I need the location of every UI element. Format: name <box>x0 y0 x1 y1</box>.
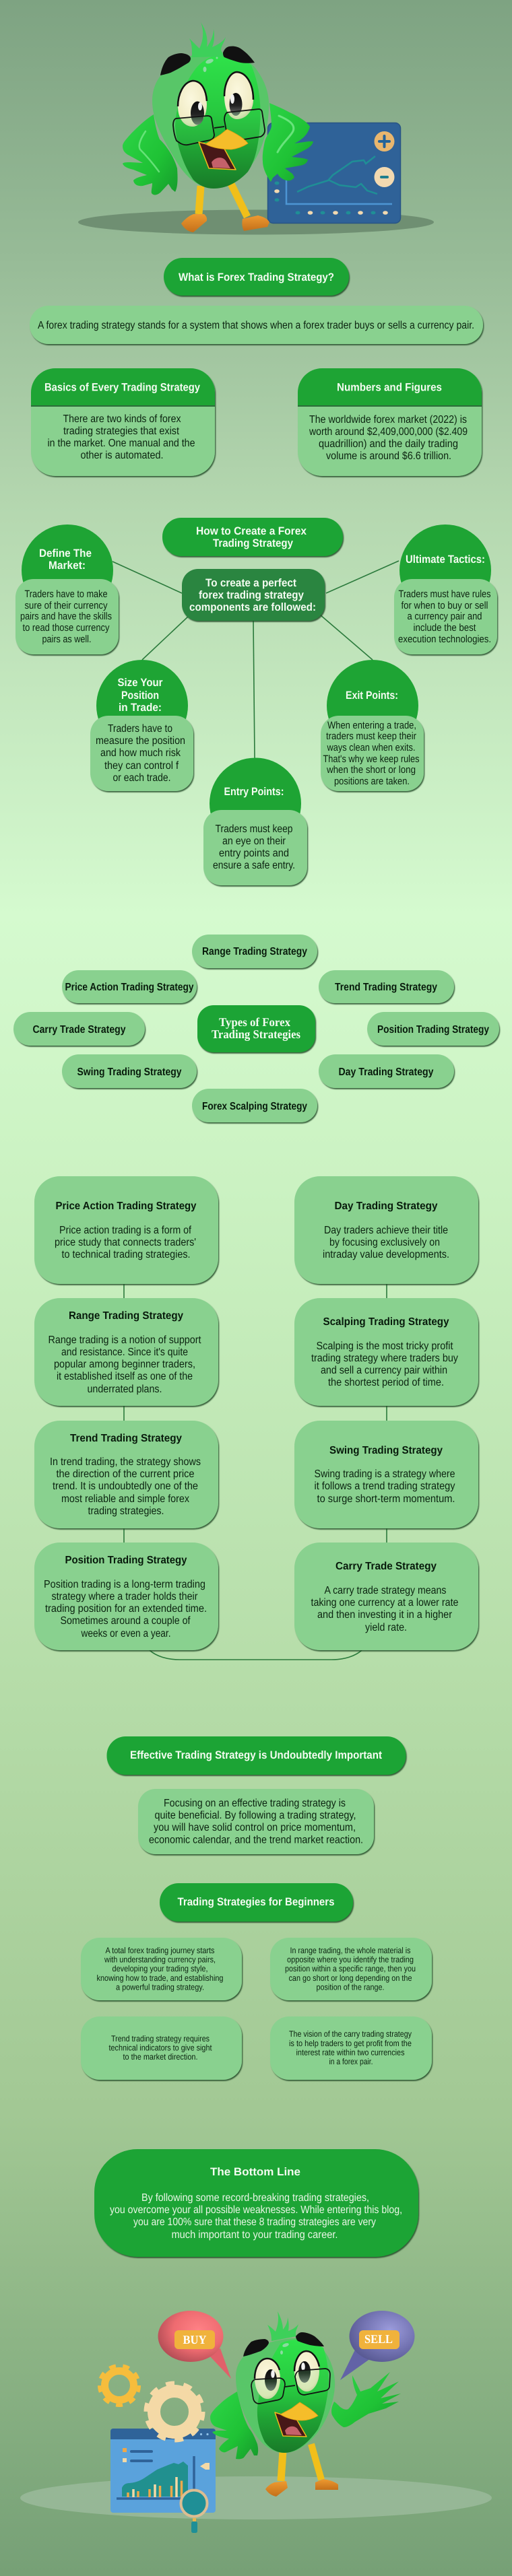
panel: the bottom line <box>94 2149 418 2257</box>
pill: scalping <box>192 1089 317 1122</box>
central node: components are followed: <box>189 601 316 613</box>
node: define the market: Define The <box>39 547 92 560</box>
beginner card: trend <box>81 2016 242 2080</box>
tongue <box>212 158 230 168</box>
node: ultimate tactics: Traders must have rules <box>399 588 490 600</box>
centre: types of forex trading strategies: Types of Forex <box>219 1015 290 1029</box>
node: define the market <box>15 524 119 654</box>
text card: focusing on effective strategy: economic calendar, and the trend market reaction. <box>149 1834 363 1846</box>
icon: beige gear <box>146 2383 203 2440</box>
panel: the bottom line: you are 100% sure that these 8 trading strategies are very <box>133 2216 376 2228</box>
card: price action trading strategy: Price Action Trading Strategy <box>55 1200 197 1212</box>
heading: how to create a forex trading strategy: How to Create a Forex <box>196 525 307 537</box>
panel: basics of every trading strategy <box>31 368 215 476</box>
text card: focusing on effective strategy: Focusing on an effective trading strategy is <box>164 1798 346 1809</box>
text card: focusing on effective strategy: quite beneficial. By following a trading strategy, <box>155 1810 356 1821</box>
panel: numbers and figures: volume is around $6.6 trillion. <box>326 450 451 462</box>
card: range trading strategy <box>34 1298 218 1406</box>
crest <box>189 22 226 57</box>
node: entry points: Entry Points: <box>224 786 284 798</box>
illustration: bird with chart panel <box>78 22 434 234</box>
node: exit points: That's why we keep rules <box>323 753 419 765</box>
panel: basics of every trading strategy: in the market. One manual and the <box>47 438 195 449</box>
card: price action trading strategy <box>34 1176 218 1284</box>
pill: range <box>192 935 317 968</box>
node: size your position in trade: and how much risk <box>100 747 181 759</box>
card: position trading strategy <box>34 1543 218 1650</box>
card: swing trading strategy <box>294 1421 478 1528</box>
analytics window <box>110 2429 216 2533</box>
card: position trading strategy: Position trading is a long-term trading <box>44 1579 205 1590</box>
card: scalping trading strategy: Scalping is the most tricky profit <box>317 1341 453 1352</box>
legs and feet <box>265 2444 338 2497</box>
buy bubble: BUY <box>183 2333 206 2346</box>
definition pill <box>30 306 483 344</box>
heading: What is Forex Trading Strategy? <box>164 258 349 296</box>
icon: yellow gear <box>100 2366 139 2405</box>
heading: effective trading strategy <box>106 1736 406 1775</box>
node: define the market: sure of their currency <box>24 600 108 611</box>
card: scalping trading strategy <box>294 1298 478 1406</box>
right arm <box>263 103 313 182</box>
heading: trading strategies for beginners: Trading Strategies for Beginners <box>178 1896 334 1908</box>
card: swing trading strategy: to surge short-term momentum. <box>317 1493 455 1505</box>
node: define the market: pairs as well. <box>42 634 92 645</box>
types of strategies cluster <box>13 935 499 1122</box>
card: trend trading strategy <box>34 1421 218 1528</box>
node: exit points <box>321 660 424 791</box>
centre: types of forex trading strategies: Trading Strategies <box>212 1027 300 1041</box>
node: entry points <box>203 758 307 885</box>
glasses <box>251 2369 330 2404</box>
pill: trend: Trend Trading Strategy <box>335 982 437 993</box>
node: ultimate tactics <box>394 524 497 654</box>
node: exit points: when the short or long <box>326 764 416 776</box>
card: swing trading strategy: Swing Trading Strategy <box>329 1445 443 1456</box>
node: size your position in trade: or each trade. <box>113 772 171 784</box>
panel: numbers and figures <box>298 368 482 476</box>
card: scalping trading strategy: Scalping Trading Strategy <box>323 1316 449 1328</box>
ground shadow <box>78 210 434 234</box>
pill: price action: Price Action Trading Strategy <box>65 982 194 993</box>
node: entry points: entry points and <box>219 848 289 859</box>
beginner card: carry: The vision of the carry trading strategy <box>289 2029 412 2039</box>
beginner card: carry: is to help traders to get profit from the <box>289 2039 412 2048</box>
beginner card: range: can go short or long depending on the <box>288 1973 412 1983</box>
beginner card: journey: A total forex trading journey starts <box>105 1946 214 1955</box>
left arm <box>210 2392 258 2459</box>
card: position trading strategy: weeks or even a year. <box>81 1628 170 1639</box>
heading: What is Forex Trading Strategy?: What is Forex Trading Strategy? <box>179 271 334 283</box>
forehead drops <box>280 2342 290 2354</box>
node: ultimate tactics: execution technologies. <box>398 634 491 645</box>
card: range trading strategy: popular among beginner traders, <box>54 1359 195 1370</box>
glasses <box>173 109 265 145</box>
card: trend trading strategy: trading strategies. <box>88 1505 164 1517</box>
card: position trading strategy: Position Trading Strategy <box>65 1555 187 1566</box>
card: trend trading strategy: the direction of the current price <box>57 1468 195 1480</box>
panel: numbers and figures: Numbers and Figures <box>337 381 442 393</box>
central node: forex trading strategy <box>199 589 305 601</box>
card: scalping trading strategy: the shortest period of time. <box>328 1377 444 1388</box>
beginner card: carry <box>270 2016 432 2080</box>
forehead drops <box>203 57 218 72</box>
pill: carry <box>13 1012 145 1046</box>
eyes <box>255 2351 319 2399</box>
node: size your position in trade: they can control f <box>104 760 179 772</box>
pill: trend <box>319 970 454 1003</box>
panel: basics of every trading strategy: Basics of Every Trading Strategy <box>44 381 201 393</box>
connector lines <box>113 561 399 758</box>
pill: day: Day Trading Strategy <box>338 1066 434 1078</box>
beginner card: range: position of the range. <box>317 1982 384 1992</box>
heading: effective trading strategy: Effective Trading Strategy is Undoubtedly Important <box>130 1749 382 1761</box>
panel: basics of every trading strategy: other is automated. <box>81 450 163 461</box>
pill: scalping: Forex Scalping Strategy <box>202 1101 307 1112</box>
pill: swing <box>62 1054 197 1088</box>
node: size your position in trade: Size Your <box>117 677 163 689</box>
heading: how to create a forex trading strategy: Trading Strategy <box>213 537 294 549</box>
pill: price action <box>62 970 197 1003</box>
beginner card: range: opposite where you identify the trading <box>287 1955 414 1965</box>
card: day trading strategy: Day traders achieve their title <box>324 1225 448 1236</box>
beginner card: carry: interest rate within two currencies <box>296 2048 404 2058</box>
centre: types of forex trading strategies <box>197 1005 315 1052</box>
node: define the market: Traders have to make <box>24 588 108 600</box>
card: swing trading strategy: it follows a trend trading strategy <box>314 1481 455 1492</box>
pill: position: Position Trading Strategy <box>377 1024 489 1036</box>
card: carry trade strategy: A carry trade strategy means <box>325 1585 446 1596</box>
card: day trading strategy <box>294 1176 478 1284</box>
card: trend trading strategy: most reliable and simple forex <box>61 1493 189 1505</box>
beginner card: journey: with understanding currency pairs, <box>104 1955 216 1965</box>
card: scalping trading strategy: and sell a currency pair within <box>321 1365 447 1376</box>
node: size your position in trade: in Trade: <box>119 702 162 714</box>
card: position trading strategy: Sometimes around a couple of <box>61 1615 191 1627</box>
sell bubble: SELL <box>364 2332 393 2346</box>
node: define the market: to read those currency <box>23 622 110 634</box>
panel: numbers and figures: quadrillion) and the daily trading <box>319 438 458 450</box>
panel: numbers and figures: worth around $2,409,000,000 ($2.409 <box>309 426 468 438</box>
card: carry trade strategy: and then investing it in a higher <box>317 1609 453 1621</box>
beginner card: range <box>270 1938 432 2000</box>
card: trend trading strategy: In trend trading, the strategy shows <box>50 1456 201 1468</box>
central node <box>182 569 325 621</box>
card: position trading strategy: trading position for an extended time. <box>45 1603 207 1615</box>
text card: focusing on effective strategy <box>138 1789 374 1854</box>
eyes <box>178 72 253 127</box>
left arm <box>123 114 178 195</box>
node: ultimate tactics: Ultimate Tactics: <box>406 553 485 566</box>
node: exit points: positions are taken. <box>334 776 410 787</box>
card: carry trade strategy <box>294 1543 478 1650</box>
text card: focusing on effective strategy: you will have solid control on price momentum, <box>154 1822 356 1833</box>
pill: swing: Swing Trading Strategy <box>77 1066 182 1078</box>
node: size your position in trade <box>90 660 193 791</box>
mouth <box>199 142 236 170</box>
panel: the bottom line: By following some record-breaking trading strategies, <box>141 2192 369 2204</box>
card: range trading strategy: Range Trading Strategy <box>69 1310 183 1322</box>
beginner card: carry: in a forex pair. <box>329 2057 373 2066</box>
node: ultimate tactics: include the best <box>414 622 476 634</box>
ground ellipse <box>20 2476 492 2519</box>
card: scalping trading strategy: trading strategy where traders buy <box>311 1353 458 1364</box>
node: exit points: ways clean when exits. <box>327 742 415 753</box>
beginner card: trend: to the market direction. <box>123 2052 198 2062</box>
panel: the bottom line: much important to your trading career. <box>171 2229 338 2241</box>
brows <box>160 46 255 75</box>
card: carry trade strategy: yield rate. <box>365 1622 407 1633</box>
pill: range: Range Trading Strategy <box>202 946 307 957</box>
tongue <box>285 2427 302 2435</box>
chart panel <box>268 123 400 224</box>
illustration: bird with buy and sell bubbles <box>20 2311 492 2533</box>
brows <box>243 2332 324 2357</box>
card: carry trade strategy: Carry Trade Strategy <box>335 1561 437 1572</box>
beginner card: trend: technical indicators to give sight <box>109 2043 212 2052</box>
panel: basics of every trading strategy: trading strategies that exist <box>63 426 179 437</box>
panel: the bottom line: you overcome your all possible weaknesses. While entering this blog, <box>110 2204 402 2216</box>
card: range trading strategy: and resistance. Since it's quite <box>61 1347 188 1358</box>
heading: trading strategies for beginners <box>160 1883 353 1922</box>
node: size your position in trade: measure the position <box>96 735 185 747</box>
buy bubble <box>158 2311 231 2379</box>
body <box>236 2338 335 2453</box>
heading: how to create a forex trading strategy <box>162 518 343 556</box>
beak <box>205 129 248 149</box>
beginner card: journey: a powerful trading strategy. <box>116 1982 204 1992</box>
node: size your position in trade: Position <box>121 689 159 702</box>
beginner card: journey: developing your trading style, <box>112 1964 207 1973</box>
card: day trading strategy: intraday value developments. <box>323 1249 449 1260</box>
card: price action trading strategy: Price action trading is a form of <box>59 1225 191 1236</box>
panel: basics of every trading strategy: There are two kinds of forex <box>63 413 181 425</box>
node: exit points: traders must keep their <box>326 731 416 742</box>
card: price action trading strategy: price study that connects traders' <box>55 1237 196 1248</box>
pill: position <box>367 1012 499 1046</box>
crest <box>267 2311 298 2341</box>
node: define the market: Market: <box>49 560 86 572</box>
beginner card: journey: knowing how to trade, and establishing <box>97 1973 224 1983</box>
card: range trading strategy: Range trading is a notion of support <box>49 1334 201 1346</box>
mouth <box>275 2412 307 2437</box>
body <box>152 53 269 189</box>
card: range trading strategy: it established itself as one of the <box>57 1371 193 1382</box>
node: entry points: an eye on their <box>222 836 286 847</box>
node: ultimate tactics: for when to buy or sell <box>402 600 488 611</box>
node: exit points: Exit Points: <box>346 689 398 702</box>
node: entry points: Traders must keep <box>216 823 293 835</box>
node: ultimate tactics: a currency pair and <box>407 611 482 622</box>
beak <box>280 2402 318 2420</box>
card: day trading strategy: by focusing exclusively on <box>329 1237 440 1248</box>
central node: To create a perfect <box>205 577 296 589</box>
beginner card: range: In range trading, the whole material is <box>290 1946 411 1955</box>
beginner card: journey <box>81 1938 242 2000</box>
beginner card: trend: Trend trading strategy requires <box>111 2034 210 2043</box>
pill: carry: Carry Trade Strategy <box>32 1024 126 1036</box>
right arm <box>331 2372 401 2427</box>
card: trend trading strategy: trend. It is undoubtedly one of the <box>53 1481 198 1492</box>
beginner card: range: position within a specific range, then you <box>285 1964 416 1973</box>
legs and feet <box>181 184 269 232</box>
strategy card connectors <box>124 1284 387 1660</box>
pill: day <box>319 1054 454 1088</box>
sell bubble <box>340 2311 415 2380</box>
node: entry points: ensure a safe entry. <box>213 860 295 871</box>
node: exit points: When entering a trade, <box>327 720 416 731</box>
card: price action trading strategy: to technical trading strategies. <box>62 1249 190 1260</box>
panel: the bottom line: The Bottom Line <box>210 2166 300 2178</box>
card: day trading strategy: Day Trading Strategy <box>334 1200 438 1212</box>
card: swing trading strategy: Swing trading is a strategy where <box>314 1468 455 1480</box>
panel: numbers and figures: The worldwide forex market (2022) is <box>309 414 467 426</box>
card: position trading strategy: strategy where a trader holds their <box>51 1591 198 1602</box>
card: carry trade strategy: taking one currency at a lower rate <box>311 1597 459 1608</box>
node: size your position in trade: Traders have to <box>108 723 172 735</box>
node: define the market: pairs and have the skills <box>20 611 112 622</box>
card: trend trading strategy: Trend Trading Strategy <box>70 1433 182 1444</box>
card: range trading strategy: underrated plans. <box>88 1384 162 1395</box>
